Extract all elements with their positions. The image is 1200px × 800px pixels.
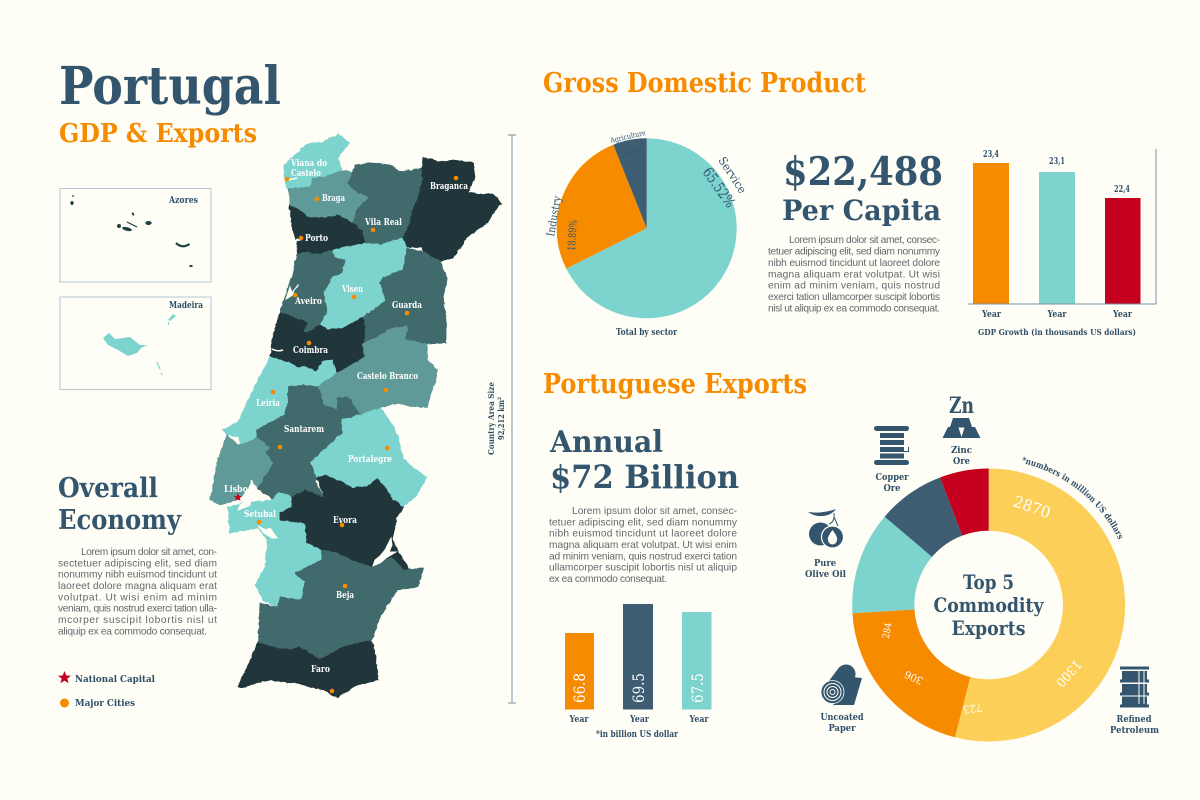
icon: copper ore: Copper bbox=[876, 473, 909, 483]
country area scale bbox=[487, 135, 516, 703]
city labels: Braganca bbox=[430, 182, 468, 192]
icon: olive oil bbox=[805, 509, 847, 580]
donut chart: top 5 commodity exports: 2870 bbox=[1011, 492, 1053, 522]
icon: zinc ore: Zn bbox=[949, 393, 974, 419]
city labels: Aveiro bbox=[294, 297, 322, 307]
city labels: Faro bbox=[311, 665, 330, 675]
stat: per capita: Per Capita bbox=[782, 194, 941, 227]
capital marker: Lisboa bbox=[234, 493, 242, 501]
icon: zinc ore bbox=[942, 393, 980, 467]
bar chart: GDP growth: Year bbox=[1047, 310, 1067, 320]
bar chart: annual exports: Year bbox=[569, 715, 589, 725]
city labels: Lisboa bbox=[224, 485, 253, 495]
region: Vila Real bbox=[348, 163, 423, 245]
icon: uncoated paper: Uncoated bbox=[820, 713, 864, 723]
text block: Overall Economy: aliquip ex ea commodo consequat. bbox=[58, 626, 207, 637]
region: Beja bbox=[258, 550, 423, 660]
icon: zinc ore: Zinc bbox=[951, 446, 972, 456]
text block: annual exports: nibh euismod tincidunt ut laoreet dolore bbox=[549, 529, 737, 540]
text block: Overall Economy: laoreet dolore magna aliquam erat bbox=[58, 581, 217, 592]
inset: Azores: Azores bbox=[168, 196, 198, 206]
bar chart: annual exports bbox=[565, 604, 712, 740]
city labels: Beja bbox=[336, 591, 354, 601]
text block: per capita: exerci tation ullamcorper suscipit lobortis bbox=[768, 292, 940, 303]
city labels: Guarda bbox=[392, 301, 422, 311]
map regions bbox=[210, 134, 501, 697]
icon: copper ore bbox=[874, 426, 909, 494]
city labels bbox=[224, 159, 468, 675]
pie chart: total by sector: Total by sector bbox=[616, 328, 677, 338]
pie chart: total by sector: 65.52% bbox=[699, 164, 739, 211]
legend: Major Cities bbox=[75, 699, 135, 709]
text block: annual exports: ad minim veniam, quis nostrud exerci tation bbox=[549, 551, 737, 562]
bar chart: GDP growth: GDP Growth (in thousands US dollars) bbox=[978, 327, 1136, 338]
major city markers bbox=[257, 176, 458, 693]
icon: uncoated paper bbox=[820, 668, 864, 734]
region: Porto bbox=[289, 205, 365, 255]
text block: per capita bbox=[768, 235, 941, 314]
map of Portugal bbox=[210, 134, 501, 697]
icon: refined petroleum bbox=[1110, 666, 1159, 736]
stat: per capita: $22,488 bbox=[783, 149, 943, 195]
text block: annual exports bbox=[549, 506, 738, 585]
city labels: Viana do bbox=[290, 159, 327, 169]
text block: Overall Economy: Lorem ipsum dolor sit amet, con- bbox=[81, 547, 217, 558]
pie chart: total by sector bbox=[544, 128, 750, 338]
text block: Overall Economy bbox=[58, 547, 217, 637]
inset: Madeira bbox=[60, 297, 211, 390]
water bodies bbox=[238, 178, 396, 696]
pie chart: total by sector: 18.89% bbox=[566, 220, 580, 251]
donut chart: top 5 commodity exports: 1300 bbox=[1052, 656, 1084, 690]
region: Viana do Castelo bbox=[284, 134, 349, 189]
stat: annual exports bbox=[549, 425, 739, 496]
legend bbox=[58, 671, 156, 709]
text block: Overall Economy: nonummy nibh euismod tincidunt ut bbox=[58, 570, 217, 581]
city labels: Castelo bbox=[291, 169, 321, 179]
stat: per capita bbox=[782, 149, 943, 227]
donut chart: top 5 commodity exports bbox=[852, 468, 1125, 742]
bar chart: GDP growth: Year bbox=[981, 310, 1001, 320]
city labels: Leiria bbox=[256, 399, 280, 409]
region: Braga bbox=[288, 170, 370, 223]
icon: zinc ore: Ore bbox=[953, 457, 970, 467]
bar chart: annual exports: 66.8 bbox=[570, 673, 589, 703]
inset: Azores bbox=[60, 188, 211, 282]
region: Coimbra bbox=[270, 312, 365, 373]
text block: annual exports: Lorem ipsum dolor sit amet, consec- bbox=[572, 506, 737, 517]
donut note: *numbers in million US dollars bbox=[1022, 456, 1122, 540]
heading: Overall Economy: Overall bbox=[58, 473, 158, 504]
region: Braganca bbox=[402, 157, 501, 261]
donut chart: top 5 commodity exports: Exports bbox=[952, 616, 1026, 640]
stat: annual exports: $72 Billion bbox=[550, 458, 739, 496]
region: Viseu bbox=[319, 238, 407, 330]
city labels: Vila Real bbox=[364, 218, 403, 228]
subtitle: GDP & Exports bbox=[59, 118, 257, 149]
text block: per capita: tetuer adipiscing elit, sed diam nonummy bbox=[768, 246, 941, 258]
inset: Madeira: Madeira bbox=[169, 301, 203, 311]
region: Faro bbox=[238, 640, 378, 697]
country area scale: Country Area Size bbox=[487, 382, 497, 455]
text block: Overall Economy: mcorper suscipit lobortis nisl ut bbox=[58, 615, 217, 626]
bar chart: GDP growth: 23,1 bbox=[1049, 157, 1065, 167]
text block: per capita: Lorem ipsum dolor sit amet, consec- bbox=[789, 235, 940, 246]
text block: Overall Economy: veniam, quis nostrud exerci tation ulla- bbox=[58, 604, 217, 615]
heading: Overall Economy bbox=[58, 473, 182, 536]
pie chart: total by sector: Agriculture bbox=[609, 128, 647, 145]
donut chart: top 5 commodity exports: Commodity bbox=[934, 593, 1045, 617]
text block: Overall Economy: volutpat. Ut wisi enim ad minim bbox=[58, 592, 217, 603]
pie chart: total by sector: 2.07% bbox=[622, 147, 644, 159]
bar chart: GDP growth bbox=[968, 149, 1156, 338]
stat: annual exports: Annual bbox=[549, 425, 663, 460]
city labels: Evora bbox=[333, 516, 357, 526]
pie chart: total by sector: Service bbox=[715, 154, 750, 196]
heading: Overall Economy: Economy bbox=[58, 505, 182, 536]
icon: olive oil: Olive Oil bbox=[805, 570, 847, 580]
city labels: Santarem bbox=[284, 425, 325, 435]
region: Leiria bbox=[222, 357, 337, 445]
text block: per capita: magna aliquam erat volutpat. Ut wisi bbox=[768, 269, 940, 280]
text block: per capita: nibh euismod tincidunt ut laoreet dolore bbox=[768, 258, 940, 269]
bar chart: annual exports: *in billion US dollar bbox=[596, 730, 678, 740]
icon: copper ore: Ore bbox=[884, 484, 901, 494]
text block: per capita: enim ad minim veniam, quis nostrud bbox=[768, 281, 940, 292]
country area scale: 92,212 km² bbox=[497, 397, 507, 440]
pie chart: total by sector: Industry bbox=[544, 194, 564, 238]
region: Evora bbox=[280, 475, 410, 572]
legend: National Capital bbox=[75, 675, 156, 685]
text block: annual exports: ex ea commodo consequat. bbox=[549, 574, 667, 585]
title: Portugal bbox=[59, 56, 281, 117]
region: Aveiro bbox=[280, 250, 345, 333]
text block: annual exports: magna aliquam erat volutpat. Ut wisi enim bbox=[549, 540, 737, 551]
bar chart: annual exports: Year bbox=[689, 715, 709, 725]
bar chart: GDP growth: Year bbox=[1112, 310, 1132, 320]
bar chart: annual exports: 67.5 bbox=[688, 673, 707, 703]
city labels: Porto bbox=[305, 234, 328, 244]
donut chart: top 5 commodity exports: Top 5 bbox=[963, 570, 1014, 594]
icon: refined petroleum: Refined bbox=[1116, 715, 1152, 725]
bar chart: GDP growth: 23,4 bbox=[983, 150, 999, 160]
icon: refined petroleum: Petroleum bbox=[1110, 726, 1159, 736]
city labels: Viseu bbox=[341, 285, 363, 295]
bar chart: annual exports: Year bbox=[629, 715, 649, 725]
text block: annual exports: ullamcorper suscipit lobortis nisl ut aliquip bbox=[549, 563, 737, 574]
region: Lisboa bbox=[210, 435, 273, 505]
icon: olive oil: Pure bbox=[814, 559, 836, 569]
donut chart: top 5 commodity exports: 723 bbox=[962, 701, 983, 715]
city labels: Setubal bbox=[244, 510, 277, 520]
heading: Gross Domestic Product: Gross Domestic Product bbox=[543, 68, 866, 99]
region: Castelo Branco bbox=[318, 327, 438, 415]
region: Portalegre bbox=[311, 408, 427, 507]
donut chart: top 5 commodity exports: 284 bbox=[881, 622, 895, 640]
text block: annual exports: tetuer adipiscing elit, sed diam nonummy bbox=[549, 517, 738, 528]
heading: Portuguese Exports: Portuguese Exports bbox=[543, 369, 807, 400]
region: Guarda bbox=[363, 248, 447, 344]
text block: per capita: nisl ut aliquip ex ea commodo consequat. bbox=[768, 303, 940, 314]
text block: Overall Economy: sectetuer adipiscing elit, sed diam bbox=[58, 558, 217, 569]
region: Santarem bbox=[257, 385, 360, 500]
bar chart: GDP growth: 22,4 bbox=[1114, 185, 1130, 195]
city labels: Castelo Branco bbox=[357, 372, 418, 382]
bar chart: annual exports: 69.5 bbox=[629, 673, 648, 703]
region: Setubal bbox=[228, 492, 322, 608]
city labels: Braga bbox=[322, 194, 345, 204]
city labels: Portalegre bbox=[348, 455, 392, 465]
icon: uncoated paper: Paper bbox=[828, 724, 856, 734]
city labels: Coimbra bbox=[293, 346, 328, 356]
donut chart: top 5 commodity exports: 306 bbox=[903, 667, 925, 686]
